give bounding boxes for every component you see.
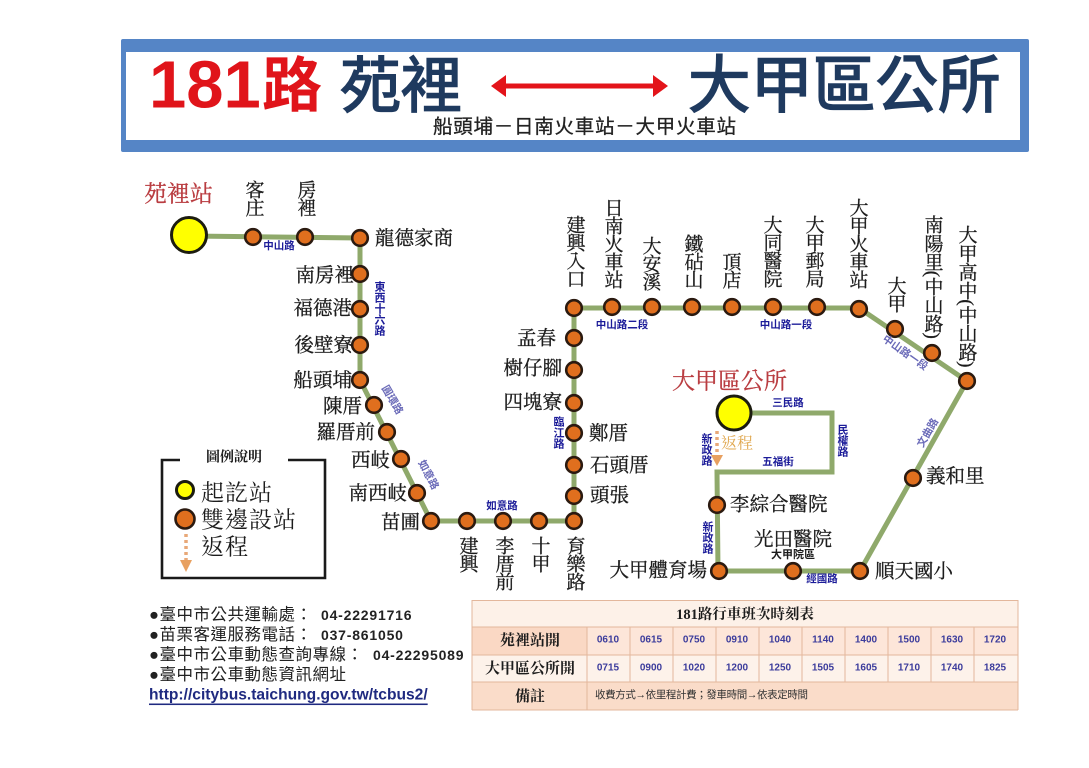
road name labels: 臨江路 <box>552 415 564 450</box>
stations: return section: 光田醫院 <box>754 528 832 550</box>
stations: top section <box>564 198 977 389</box>
stations: top section: 鐵砧山 <box>682 234 703 289</box>
row: from Dajia: 0900 <box>640 662 663 674</box>
table title: 181路行車班次時刻表 <box>676 605 814 623</box>
stations: first section: 南房裡 <box>295 264 354 286</box>
stations: first section: 南西岐 <box>348 482 407 504</box>
stations: riverside section: 樹仔腳 <box>503 358 562 380</box>
row: remarks: 備註 <box>515 688 545 705</box>
row: from Yuanli: 0750 <box>683 634 706 646</box>
contact: transit bureau <box>149 605 412 624</box>
row: from Dajia: 1740 <box>941 662 964 674</box>
contact: Miaoli bus: 037-861050 <box>321 627 404 643</box>
row: from Yuanli: 苑裡站開 <box>500 631 560 649</box>
stations: return section: 順天國小 <box>875 560 954 582</box>
road name labels: 經國路 <box>806 572 838 585</box>
stations: first section: 西岐 <box>351 450 390 472</box>
row: from Dajia: 1200 <box>726 662 749 674</box>
contact information <box>149 605 464 704</box>
legend: return <box>180 534 249 572</box>
stations: riverside section: 鄭厝 <box>589 422 628 444</box>
contact: Miaoli bus <box>149 625 404 644</box>
stations: first section: 苗圃 <box>381 512 420 534</box>
row: from Yuanli: 0910 <box>726 634 749 646</box>
road name labels: 民權路 <box>836 424 848 458</box>
stations: return section: 大甲院區 <box>771 547 815 561</box>
panel: legend <box>162 450 325 578</box>
row: from Dajia: 0715 <box>597 662 620 674</box>
stations: top section: 建興入口 <box>564 215 585 287</box>
road name labels: 三民路 <box>772 396 804 409</box>
road name labels: 文曲路 <box>914 415 941 450</box>
stations: bottom section: 李厝前 <box>492 536 514 591</box>
road name labels: 中山路 <box>263 239 295 252</box>
contact: website url: http://citybus.taichung.gov.tw/tcbus2/ <box>149 686 428 704</box>
stations: riverside section: 孟春 <box>517 328 556 350</box>
road name labels: 東西十六路 <box>373 280 386 337</box>
heading: destination: 大甲區公所 <box>688 51 1000 121</box>
stations: top section: 大甲郵局 <box>802 215 824 288</box>
row: from Dajia: 1710 <box>898 662 921 674</box>
road name labels: 新政路 <box>701 520 714 555</box>
row: from Dajia: 1505 <box>812 662 835 674</box>
panel: header banner <box>121 39 1029 152</box>
stations: first section: 後壁寮 <box>294 334 353 356</box>
row: from Dajia: 1825 <box>984 662 1007 674</box>
heading: route number <box>149 48 322 122</box>
stations: first section: 客庄 <box>242 180 264 217</box>
stations: top section: 大甲火車站 <box>846 198 868 289</box>
stations: first section: 陳厝 <box>323 396 362 418</box>
heading: origin: 苑裡 <box>340 52 462 120</box>
row: from Yuanli: 1500 <box>898 634 921 646</box>
stations: first section <box>242 180 453 534</box>
row: from Yuanli: 1630 <box>941 634 964 646</box>
stations: riverside section <box>503 328 649 506</box>
road name labels: 中山路一段 <box>760 318 813 331</box>
stations: first section: 船頭埔 <box>293 370 352 392</box>
stations: first section: 房裡 <box>294 180 316 217</box>
title: Dajia district office: 大甲區公所 <box>672 368 787 394</box>
subtitle: via stops: 船頭埔－日南火車站－大甲火車站 <box>433 116 736 138</box>
stations: first section: 福德港 <box>293 298 352 320</box>
contact: hotline: ●臺中市公車動態查詢專線： <box>149 645 363 664</box>
road name labels <box>263 239 941 585</box>
station: Dajia terminal <box>717 396 751 430</box>
contact: Miaoli bus: ●苗栗客運服務電話： <box>149 625 312 644</box>
stations: top section: 頂店 <box>720 252 741 289</box>
stations: riverside section: 頭張 <box>590 484 629 506</box>
title: Yuanli station: 苑裡站 <box>144 182 213 206</box>
road name labels: 中山路一段 <box>880 332 931 373</box>
row: remarks: 收費方式→依里程計費；發車時間→依表定時間 <box>595 688 808 701</box>
stations: return section: 李綜合醫院 <box>730 494 828 516</box>
contact: hotline <box>149 645 464 664</box>
contact: transit bureau: ●臺中市公共運輸處： <box>149 605 312 624</box>
contact: transit bureau: 04-22291716 <box>321 607 412 623</box>
route map <box>144 180 985 591</box>
legend: return: 返程 <box>201 534 249 560</box>
contact: website label: ●臺中市公車動態資訊網址 <box>149 665 346 684</box>
row: remarks <box>515 688 808 705</box>
stations: riverside section: 石頭厝 <box>590 454 649 476</box>
stations: return section: 大甲體育場 <box>609 560 707 582</box>
label: return: 返程 <box>721 434 753 452</box>
row: from Yuanli: 1040 <box>769 634 792 646</box>
row: from Dajia: 1250 <box>769 662 792 674</box>
row: from Dajia: 1605 <box>855 662 878 674</box>
row: from Yuanli: 1400 <box>855 634 878 646</box>
row: from Yuanli: 0615 <box>640 634 663 646</box>
row: from Yuanli: 0610 <box>597 634 620 646</box>
station: Yuanli terminal <box>172 218 206 252</box>
road name labels: 中山路二段 <box>596 318 649 331</box>
legend heading: 圖例說明 <box>206 450 262 466</box>
route line: outbound <box>189 236 967 571</box>
row: from Yuanli <box>500 631 1007 649</box>
road name labels: 如意路 <box>486 499 518 512</box>
stations: first section: 羅厝前 <box>316 422 375 444</box>
legend: terminal: 起訖站 <box>201 480 273 506</box>
row: from Yuanli: 1720 <box>984 634 1007 646</box>
stations: return section <box>609 466 985 582</box>
arrow: return direction <box>711 431 723 466</box>
stations: top section: 大甲高中(中山路) <box>956 225 977 367</box>
stations: top section: 大安溪 <box>640 236 661 292</box>
stations: bottom section: 建興 <box>456 536 478 574</box>
road name labels: 如意路 <box>415 458 442 492</box>
heading: route number: 路 <box>262 52 322 120</box>
row: from Yuanli: 1140 <box>812 634 834 646</box>
road name labels: 五福街 <box>762 455 794 468</box>
stations: top section: 大甲 <box>884 276 906 313</box>
row: from Dajia: 大甲區公所開 <box>485 659 575 677</box>
stations: top section: 大同醫院 <box>760 215 782 288</box>
stations: bottom section: 育樂路 <box>564 536 585 591</box>
row: from Dajia <box>485 659 1007 677</box>
stations: return section: 義和里 <box>926 466 985 488</box>
road name labels: 新政路 <box>700 432 712 467</box>
stations: bottom section: 十甲 <box>528 536 550 573</box>
stations: bottom section <box>456 513 585 591</box>
road name labels: 圓環路 <box>379 383 406 417</box>
legend: two-side stop: 雙邊設站 <box>201 508 297 532</box>
row: from Dajia: 1020 <box>683 662 706 674</box>
arrow: two-way <box>491 75 668 97</box>
contact: hotline: 04-22295089 <box>373 647 464 663</box>
heading: route number: 181 <box>149 48 261 122</box>
timetable <box>472 600 1018 710</box>
stations: top section: 日南火車站 <box>602 198 623 289</box>
stations: first section: 龍德家商 <box>375 228 453 250</box>
stations: riverside section: 四塊寮 <box>503 392 562 414</box>
stations: top section: 南陽里(中山路) <box>922 215 943 339</box>
